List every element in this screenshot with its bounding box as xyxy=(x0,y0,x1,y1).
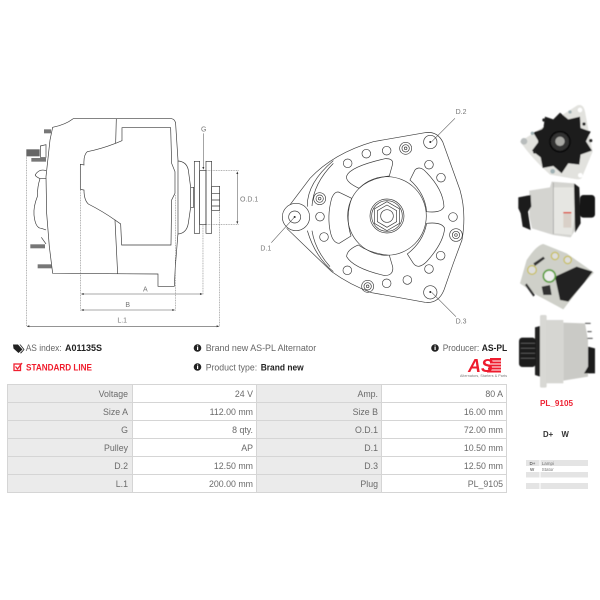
row 1: Amp. xyxy=(357,389,378,399)
row 1: 24 V xyxy=(235,389,253,399)
row 2: Size A xyxy=(103,407,128,417)
row 2: 112.00 mm xyxy=(210,407,253,417)
info: AS index: AS index: xyxy=(26,343,62,353)
icon: info xyxy=(194,344,201,352)
row 2: 16.00 mm xyxy=(464,407,503,417)
row 3: 8 qty. xyxy=(232,425,253,435)
specifications table xyxy=(8,384,506,492)
row 6: L.1 xyxy=(116,479,128,489)
row 5: D.3 xyxy=(364,461,378,471)
row 5: 12.50 mm xyxy=(464,461,503,471)
row 5: 12.50 mm xyxy=(214,461,253,471)
icon: info xyxy=(431,344,439,352)
info: product type: Brand new xyxy=(261,362,305,372)
row 6: 200.00 mm xyxy=(209,479,253,489)
row 5 xyxy=(114,461,503,471)
inner flange arcs xyxy=(307,161,333,272)
row 1 xyxy=(99,389,503,399)
info: standard line: STANDARD LINE xyxy=(26,362,92,372)
leader lines and labels: D.3 xyxy=(456,319,467,326)
pivot lug D.1 xyxy=(282,203,310,231)
plug terminal D+: D+ xyxy=(543,430,554,439)
row 4: Pulley xyxy=(104,443,129,453)
terminal legend table: D+ xyxy=(530,461,536,466)
row 6: PL_9105 xyxy=(468,479,503,489)
row 4: AP xyxy=(241,443,253,453)
photo: front fan view xyxy=(520,105,593,179)
terminal legend table: Lampi xyxy=(542,461,554,466)
info: AS index xyxy=(13,343,102,354)
row 1: 80 A xyxy=(485,389,503,399)
dimension lines and labels xyxy=(26,126,258,327)
dimension lines and labels: A xyxy=(143,286,148,293)
info: product type: Product type: xyxy=(206,362,257,372)
front view technical drawing xyxy=(260,109,467,326)
row 6 xyxy=(116,479,503,489)
row 3: 72.00 mm xyxy=(464,425,503,435)
row 2 xyxy=(103,407,503,417)
row 4: 10.50 mm xyxy=(464,443,503,453)
info: AS index: A01135S xyxy=(65,343,102,353)
row 2: Size B xyxy=(353,407,378,417)
photo: side view left xyxy=(519,315,595,388)
logo: AS: Alternators, Starters & Parts xyxy=(460,374,507,378)
logo: AS: AS xyxy=(467,356,493,376)
photo: rear view xyxy=(520,244,594,309)
plug code: PL_9105 xyxy=(540,399,574,408)
side view technical drawing xyxy=(26,119,258,327)
dimension lines and labels: L.1 xyxy=(117,317,127,324)
icon: red check box xyxy=(14,363,22,370)
row 4: D.1 xyxy=(364,443,378,453)
mounting holes xyxy=(316,135,457,299)
alternator side outline xyxy=(34,119,220,286)
logo: AS xyxy=(460,356,507,378)
flange plate outline xyxy=(287,132,464,302)
through-bolts xyxy=(314,142,462,292)
row 6: Plug xyxy=(360,479,378,489)
row 5: D.2 xyxy=(114,461,128,471)
row 4 xyxy=(104,443,503,453)
photo: side view right xyxy=(518,182,595,237)
dimension lines and labels: G xyxy=(201,126,206,133)
terminal legend table xyxy=(526,460,588,490)
icon: tags xyxy=(13,344,24,354)
terminal legend table: Stator xyxy=(542,467,554,472)
ventilation windows xyxy=(329,159,445,276)
info: producer: Producer: xyxy=(443,343,479,353)
info: producer: AS-PL xyxy=(482,343,508,353)
info: brand new alternator: Brand new AS-PL Alternator xyxy=(206,343,316,353)
terminal legend table: W xyxy=(530,467,535,472)
info: producer xyxy=(431,343,508,353)
row 3: G xyxy=(121,425,128,435)
leader lines and labels xyxy=(260,109,467,326)
row 1: Voltage xyxy=(99,389,128,399)
dimension lines and labels: O.D.1 xyxy=(240,197,258,204)
rear terminal studs xyxy=(26,129,52,268)
plug terminal W: W xyxy=(562,430,570,439)
row 3: O.D.1 xyxy=(355,425,378,435)
leader lines and labels: D.2 xyxy=(456,109,467,116)
dimension lines and labels: B xyxy=(125,302,130,309)
info: product type xyxy=(194,362,305,372)
leader lines and labels: D.1 xyxy=(260,246,271,253)
rotor hub and nut xyxy=(348,177,426,255)
row 3 xyxy=(121,425,503,435)
icon: info xyxy=(194,363,201,371)
